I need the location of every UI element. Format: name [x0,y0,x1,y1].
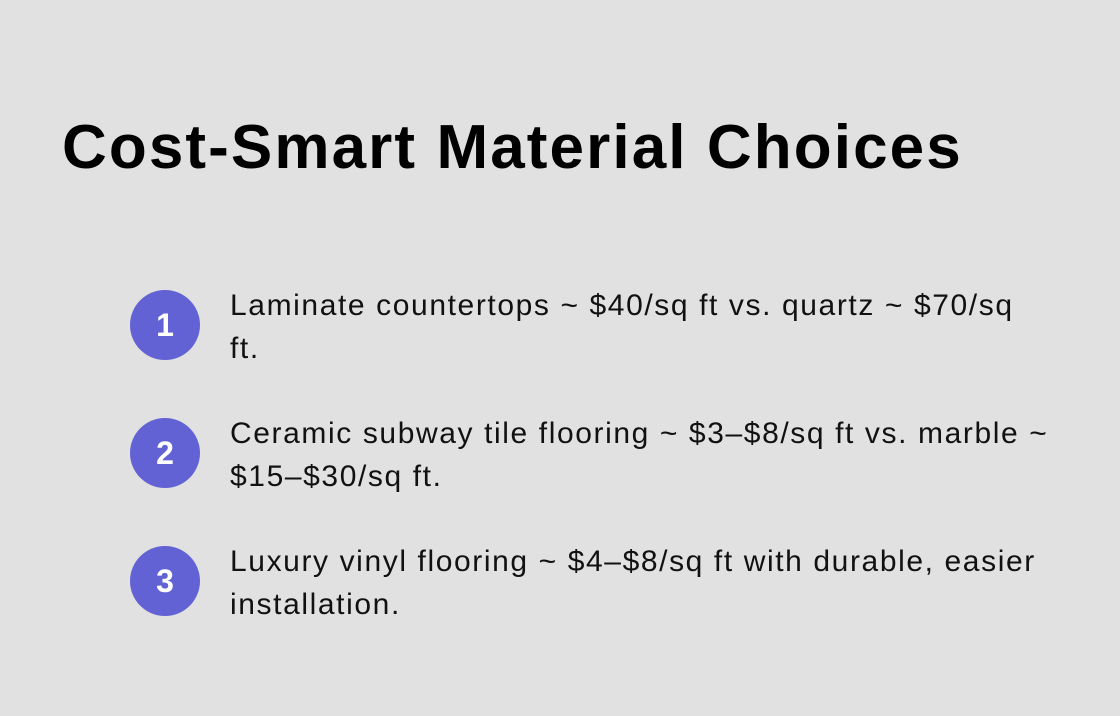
text 2: Ceramic subway tile flooring ~ $3–$8/sq ft vs. marble ~ [230,417,1048,450]
item 2 [130,417,1048,493]
text 2: $15–$30/sq ft. [230,460,443,493]
icon: number 3: 3 [156,563,174,599]
text 2 [230,417,1048,493]
text 1: Laminate countertops ~ $40/sq ft vs. quartz ~ $70/sq [230,289,1014,322]
text 3: Luxury vinyl flooring ~ $4–$8/sq ft with durable, easier [230,545,1036,578]
item 3 [130,545,1036,621]
icon: number 2 [130,418,200,488]
text 1 [230,289,1014,365]
title: Cost-Smart Material Choices [62,113,963,182]
icon: number 1 [130,290,200,360]
item 1 [130,289,1014,365]
icon: number 3 [130,546,200,616]
text 1: ft. [230,332,260,365]
icon: number 1: 1 [156,307,174,343]
icon: number 2: 2 [156,435,174,471]
text 3: installation. [230,588,401,621]
text 3 [230,545,1036,621]
